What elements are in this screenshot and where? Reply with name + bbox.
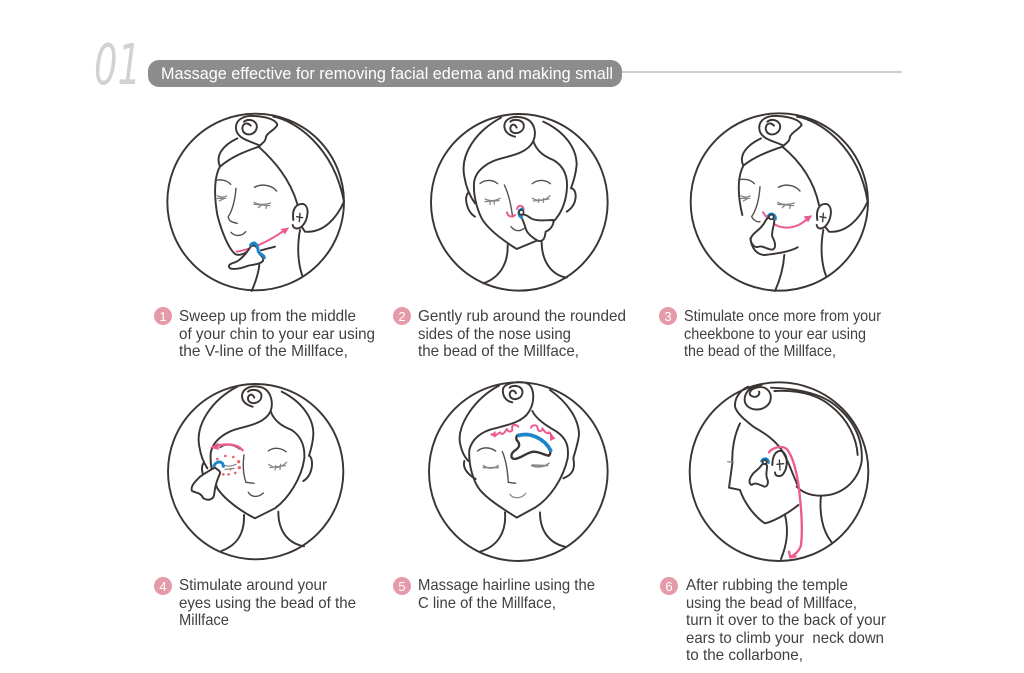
- illustration 1: chin to ear sweep: [167, 114, 344, 291]
- step 2 text: the bead of the Millface,: [418, 343, 579, 360]
- step 4 text: Millface: [179, 612, 229, 629]
- step 6 text: using the bead of Millface,: [686, 595, 857, 612]
- step 2 text: [393, 307, 626, 360]
- step 4 text: [154, 577, 356, 629]
- step 6 text: ears to climb your neck down: [686, 630, 884, 647]
- step 6 text: [660, 577, 886, 664]
- illustration 2: around the nose: [431, 114, 608, 291]
- step 5 text: [393, 577, 595, 612]
- step 1 text: 1: [159, 309, 167, 324]
- step 3 text: the bead of the Millface,: [684, 343, 836, 360]
- header rule: [620, 71, 902, 73]
- step 5 text: C line of the Millface,: [418, 595, 556, 612]
- illustration 4: around the eyes: [168, 384, 343, 559]
- step 4 text: Stimulate around your: [179, 577, 327, 594]
- illustration 6: temple to collarbone side view: [690, 382, 868, 561]
- step 5 text: 5: [398, 579, 406, 594]
- step 3 text: 3: [664, 309, 672, 324]
- step 2 text: Gently rub around the rounded: [418, 308, 626, 325]
- step 1 text: of your chin to your ear using: [179, 326, 375, 343]
- step 6 text: to the collarbone,: [686, 647, 803, 664]
- step 3 text: cheekbone to your ear using: [684, 326, 866, 343]
- step 4 text: 4: [159, 579, 167, 594]
- step 1 text: Sweep up from the middle: [179, 308, 356, 325]
- step 6 text: After rubbing the temple: [686, 577, 848, 594]
- step 3 text: Stimulate once more from your: [684, 308, 881, 325]
- step 2 text: sides of the nose using: [418, 326, 571, 343]
- step 6 text: 6: [665, 579, 673, 594]
- step 3 text: [659, 307, 881, 360]
- step 5 text: Massage hairline using the: [418, 577, 595, 594]
- heading pill: Massage effective for removing facial edema and making small: [161, 64, 613, 83]
- section number 01: 01: [94, 33, 141, 98]
- heading pill: [148, 60, 622, 87]
- illustration 3: cheekbone to ear: [691, 113, 868, 291]
- step 2 text: 2: [398, 309, 406, 324]
- step 4 text: eyes using the bead of the: [179, 595, 356, 612]
- step 1 text: [154, 307, 375, 360]
- step 1 text: the V-line of the Millface,: [179, 343, 348, 360]
- illustration 5: hairline with C line: [429, 382, 608, 561]
- step 6 text: turn it over to the back of your: [686, 612, 886, 629]
